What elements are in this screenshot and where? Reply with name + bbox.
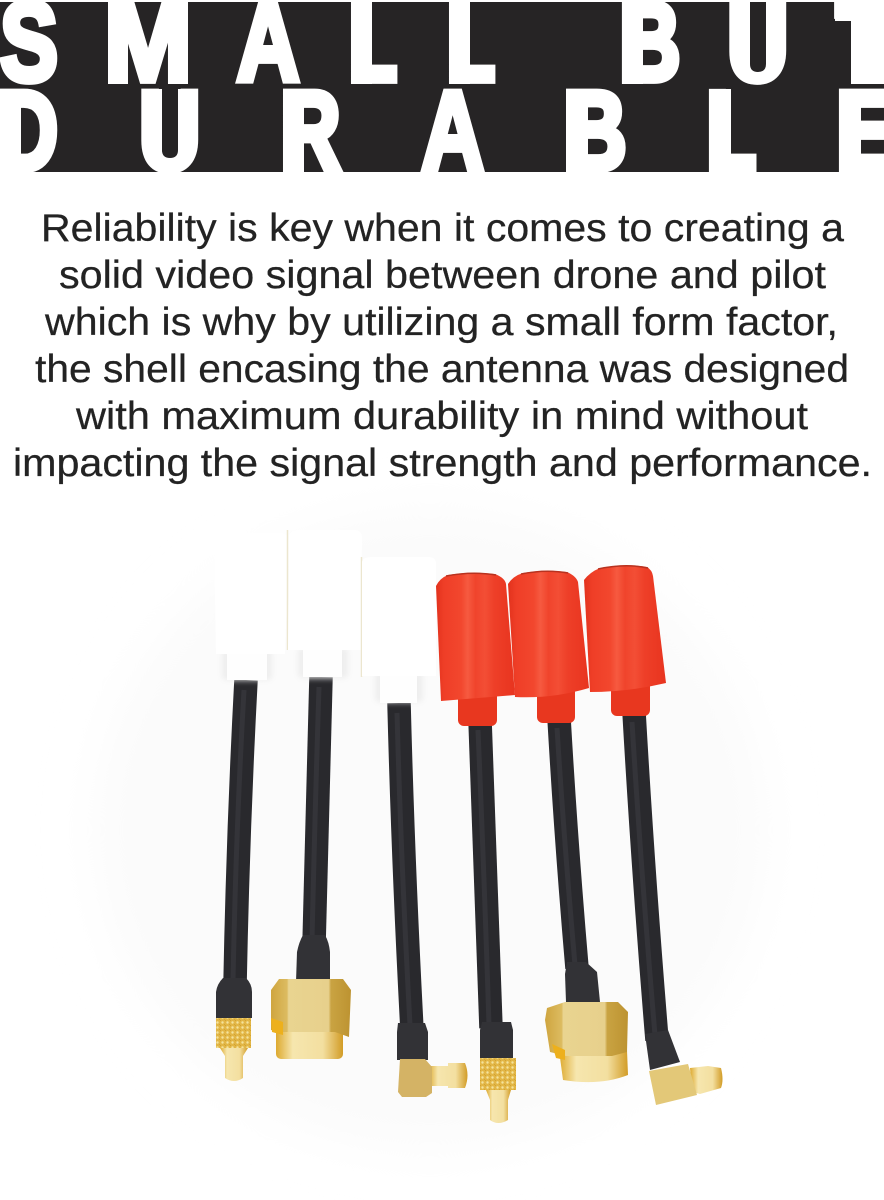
title banner: SMALL BUT DURABLE: L [706, 68, 757, 193]
title banner: SMALL BUT DURABLE: B [563, 69, 627, 194]
body paragraph [13, 207, 872, 485]
photo backdrop [95, 510, 765, 1150]
antenna 3: white with right-angle connector [362, 557, 468, 1097]
body paragraph: impacting the signal strength and performance. [13, 442, 872, 485]
title banner: SMALL BUT DURABLE: R [280, 69, 341, 194]
antenna 5: red with SMA connector [508, 571, 628, 1082]
body paragraph: with maximum durability in mind without [75, 395, 808, 438]
title banner: SMALL BUT DURABLE [0, 2, 884, 172]
title banner: SMALL BUT DURABLE: A [422, 70, 484, 194]
body paragraph: the shell encasing the antenna was designed [35, 348, 849, 391]
body paragraph: which is why by utilizing a small form factor, [44, 301, 838, 344]
antenna 6: red with right-angle connector [584, 565, 722, 1105]
body paragraph: solid video signal between drone and pilot [59, 254, 826, 297]
antenna 1: white with MMCX straight connector [214, 533, 289, 1081]
title banner: SMALL BUT DURABLE: U [139, 70, 201, 194]
antenna 4: red with MMCX straight connector [436, 573, 516, 1123]
body paragraph: Reliability is key when it comes to creating a [41, 207, 845, 250]
antenna 2: white with SMA connector [271, 530, 362, 1059]
